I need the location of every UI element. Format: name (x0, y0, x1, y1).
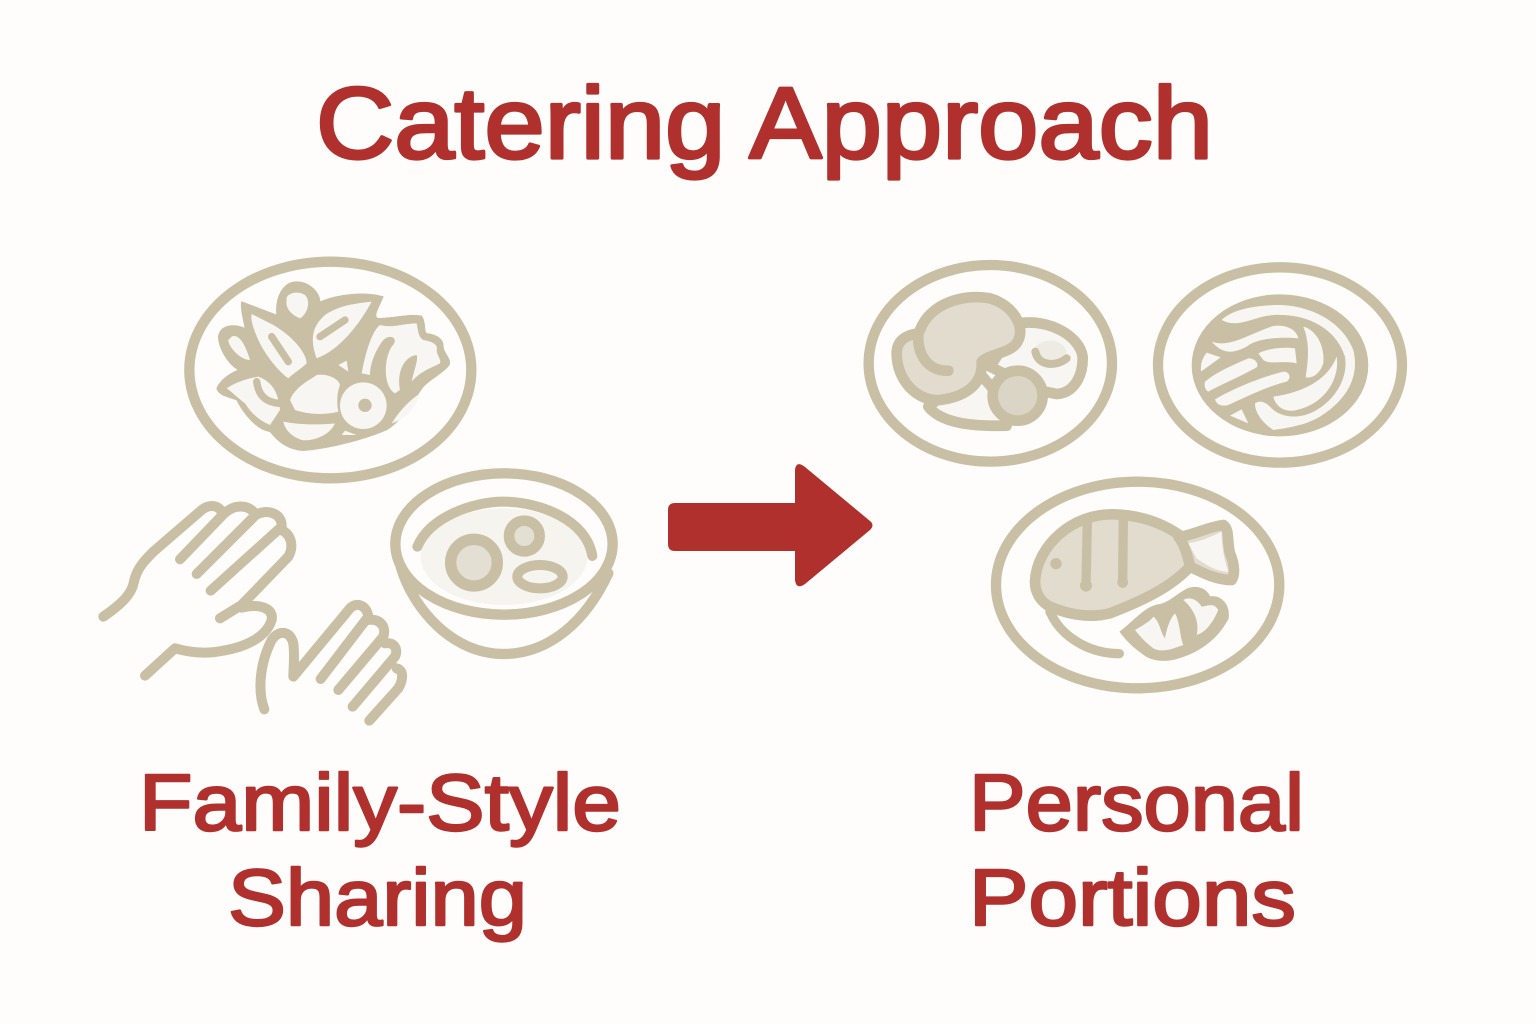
title: Catering Approach (316, 68, 1213, 180)
label: family-style sharing: Sharing (228, 853, 527, 942)
arrow (668, 464, 872, 586)
label: personal portions: Portions (969, 853, 1296, 942)
icon: soup bowl (395, 473, 613, 654)
icon: shared salad plate (189, 262, 471, 478)
icon: plate with meat and sides (869, 265, 1112, 462)
icon: plate with fish (996, 482, 1279, 688)
icon: plate with noodles (1158, 267, 1402, 463)
label: personal portions: Personal (969, 758, 1304, 847)
icon: reaching hands (103, 506, 402, 721)
right hand (260, 605, 402, 721)
left hand (103, 506, 291, 676)
label: personal portions (969, 758, 1304, 942)
label: family-style sharing (139, 758, 621, 942)
label: family-style sharing: Family-Style (139, 758, 621, 847)
